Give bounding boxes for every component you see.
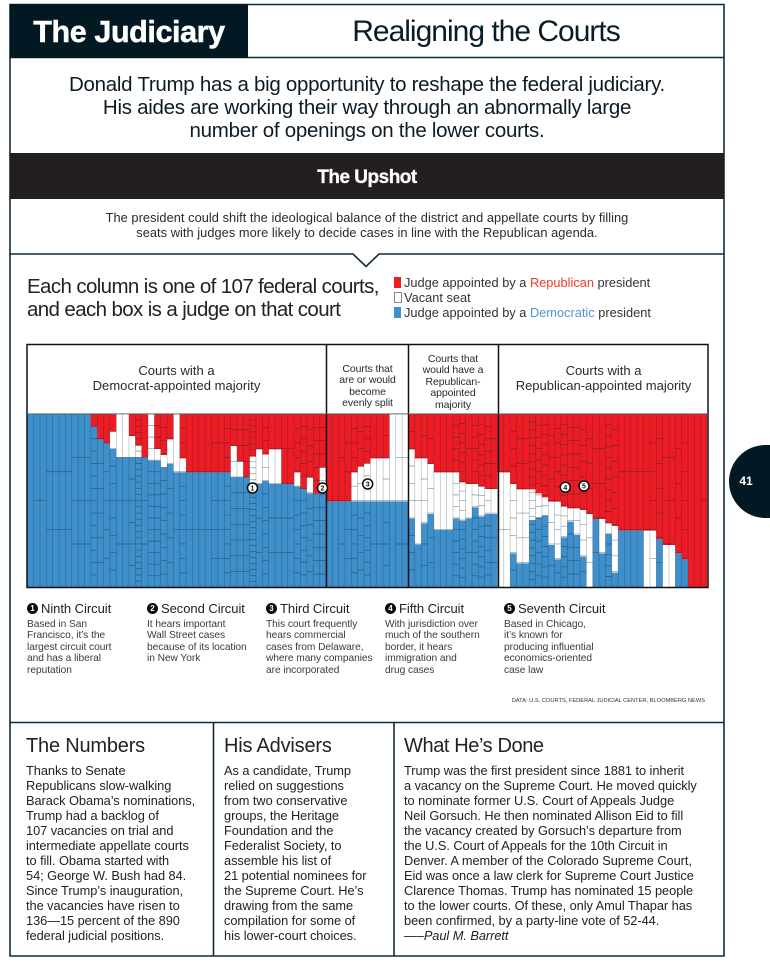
callout: Third Circuit: hears commercial: [266, 630, 346, 641]
body text: his lower-court choices.: [224, 928, 357, 943]
body text: federal judicial positions.: [26, 928, 164, 943]
header: evenly split: evenly split: [342, 397, 393, 409]
intro text: His aides are working their way through an abnormally large: [103, 96, 631, 118]
legend labels: Vacant seat: [404, 290, 471, 305]
callout: Fifth Circuit: Fifth Circuit: [399, 601, 464, 616]
header: Republican majority: Courts with a: [566, 363, 641, 378]
marker 2: 2: [321, 486, 325, 492]
body text: Denver. A member of the Colorado Supreme Court,: [404, 853, 692, 868]
body text: 107 vacancies on trial and: [26, 823, 173, 838]
callout: Seventh Circuit: [504, 601, 606, 676]
heading: What He’s Done: [404, 735, 544, 757]
source note: DATA: U.S. COURTS, FEDERAL JUDICIAL CENTER, BLOOMBERG NEWS: [512, 698, 705, 704]
panel: What He's Done: [404, 735, 697, 943]
header: Republican majority: [516, 363, 692, 393]
body text: Clarence Thomas. Trump has nominated 15 people: [404, 883, 693, 898]
body text: As a candidate, Trump: [224, 763, 351, 778]
intro text: number of openings on the lower courts.: [190, 118, 544, 142]
legend labels: [404, 275, 651, 320]
legend: vacant swatch: [394, 292, 402, 303]
section label: The Judiciary: The Judiciary: [33, 15, 225, 49]
callout: Ninth Circuit: Francisco, it’s the: [27, 630, 105, 641]
marker 2: [318, 483, 328, 493]
body text: Eid was once a law clerk for Supreme Court Justice: [404, 868, 694, 883]
summary text: [106, 210, 628, 240]
header: would have Republican majority: appointed: [430, 387, 476, 399]
body text: groups, the Heritage: [224, 808, 339, 823]
legend labels: Judge appointed by a Republican president: [404, 275, 650, 290]
callout: Fifth Circuit: immigration and: [385, 653, 457, 664]
body text: [404, 763, 697, 943]
callout: Ninth Circuit: Based in San: [27, 619, 87, 630]
callout: Seventh Circuit: 5: [507, 604, 512, 613]
chart explanation heading: [27, 275, 379, 321]
panel: His Advisers: [224, 735, 366, 943]
header: evenly split: are or would: [339, 374, 396, 386]
heading: His Advisers: [224, 735, 332, 757]
body text: Republicans slow-walking: [26, 778, 171, 793]
page number tab: 41: [739, 474, 753, 488]
callout: Second Circuit: [147, 601, 247, 664]
callout: Third Circuit: 3: [269, 604, 274, 613]
callout: Seventh Circuit: producing influential: [504, 642, 594, 653]
body text: Federalist Society, to: [224, 838, 341, 853]
body text: 136—15 percent of the 890: [26, 913, 180, 928]
marker 1: 1: [251, 486, 255, 492]
header: would have Republican majority: majority: [435, 398, 471, 410]
callout: Fifth Circuit: 4: [388, 604, 393, 613]
callout: Third Circuit: cases from Delaware,: [266, 642, 364, 653]
callout: Second Circuit: 2: [150, 604, 155, 613]
body text: assemble his list of: [224, 853, 331, 868]
callout: Ninth Circuit: [27, 601, 112, 676]
callout: Second Circuit: Wall Street cases: [147, 630, 225, 641]
callout: Seventh Circuit: Based in Chicago,: [504, 619, 586, 630]
body text: to nominate former U.S. Court of Appeals Judge: [404, 793, 674, 808]
callout: Fifth Circuit: [385, 601, 480, 676]
callout: Seventh Circuit: it’s known for: [504, 630, 563, 641]
column headers: [93, 352, 692, 410]
header: would have Republican majority: Republican-: [426, 376, 480, 388]
body text: Barack Obama’s nominations,: [26, 793, 195, 808]
callout: Third Circuit: Third Circuit: [280, 601, 349, 616]
banner: The Upshot: The Upshot: [317, 167, 417, 188]
body text: the Supreme Court. He’s: [224, 883, 363, 898]
intro text: Donald Trump has a big opportunity to reshape the federal judiciary.: [69, 72, 665, 96]
marker 1: [248, 483, 258, 493]
body text: Since Trump’s inauguration,: [26, 883, 183, 898]
heading: The Numbers: [26, 735, 145, 757]
header: would have Republican majority: [422, 352, 484, 410]
body text: Trump was the first president since 1881 to inherit: [404, 763, 684, 778]
callout: Seventh Circuit: economics-oriented: [504, 653, 592, 664]
page number tab: [729, 445, 770, 518]
callout: Second Circuit: in New York: [147, 653, 200, 664]
marker 5: 5: [582, 484, 586, 490]
callout: Third Circuit: [266, 601, 373, 676]
marker 4: [560, 482, 570, 492]
header: would have Republican majority: would have a: [423, 364, 483, 376]
body text: drawing from the same: [224, 898, 353, 913]
callout: Ninth Circuit: Ninth Circuit: [41, 601, 111, 616]
summary text: The president could shift the ideological balance of the district and appellate courts by filling: [106, 210, 628, 224]
marker 5: [579, 481, 589, 491]
callout: Fifth Circuit: drug cases: [385, 665, 434, 676]
body text: relied on suggestions: [224, 778, 344, 793]
marker 3: 3: [366, 482, 370, 488]
body text: to fill. Obama started with: [26, 853, 169, 868]
callout: Second Circuit: because of its location: [147, 642, 247, 653]
body text: Thanks to Senate: [26, 763, 126, 778]
legend labels: Judge appointed by a Democratic president: [404, 305, 651, 320]
callout: Second Circuit: Second Circuit: [161, 601, 245, 616]
header: Democrat majority: [93, 363, 260, 393]
header: Republican majority: Republican-appointed majority: [516, 378, 691, 393]
panel: The Numbers: [26, 735, 195, 943]
chart explanation heading: and each box is a judge on that court: [27, 298, 340, 321]
legend: blue swatch: [394, 307, 401, 318]
callout: Fifth Circuit: With jurisdiction over: [385, 619, 478, 630]
callout: Fifth Circuit: much of the southern: [385, 630, 480, 641]
header: evenly split: Courts that: [342, 362, 393, 374]
callout: Ninth Circuit: and has a liberal: [27, 653, 101, 664]
header: Democrat majority: Courts with a: [138, 363, 215, 378]
body text: a vacancy on the Supreme Court. He moved quickly: [404, 778, 697, 793]
body text: to the lower courts. Of these, only Amul Thapar has: [404, 898, 692, 913]
body text: been confirmed, by a party-line vote of 52-44.: [404, 913, 659, 928]
legend: [394, 275, 651, 320]
chart explanation heading: Each column is one of 107 federal courts,: [27, 275, 379, 298]
marker 4: 4: [563, 485, 567, 492]
body text: from two conservative: [224, 793, 347, 808]
body text: —–Paul M. Barrett: [404, 928, 508, 943]
section label: The Judiciary: [10, 4, 248, 58]
body text: 54; George W. Bush had 84.: [26, 868, 186, 883]
body text: the vacancy created by Gorsuch’s departure from: [404, 823, 682, 838]
body text: the U.S. Court of Appeals for the 10th Circuit in: [404, 838, 668, 853]
callout: Ninth Circuit: largest circuit court: [27, 642, 111, 653]
legend: red swatch: [394, 277, 401, 288]
body text: Neil Gorsuch. He then nominated Allison Eid to fill: [404, 808, 683, 823]
callout: Ninth Circuit: 1: [30, 604, 35, 613]
header: Democrat majority: Democrat-appointed majority: [93, 378, 260, 393]
callout: Third Circuit: This court frequently: [266, 619, 357, 630]
summary text: seats with judges more likely to decide cases in line with the Republican agenda.: [136, 225, 598, 240]
body text: [224, 763, 366, 943]
intro text: [69, 72, 665, 142]
header: evenly split: [339, 362, 396, 409]
title: Realigning the Courts: [352, 15, 620, 48]
body text: Trump had a backlog of: [26, 808, 159, 823]
marker 3: [363, 479, 373, 489]
callout: Third Circuit: where many companies: [266, 653, 373, 664]
callout: Fifth Circuit: border, it hears: [385, 642, 452, 653]
callout: Seventh Circuit: Seventh Circuit: [518, 601, 605, 616]
body text: compilation for some of: [224, 913, 355, 928]
body text: the vacancies have risen to: [26, 898, 180, 913]
body text: [26, 763, 195, 943]
header: evenly split: become: [349, 386, 386, 398]
callout: Seventh Circuit: case law: [504, 665, 543, 676]
banner: The Upshot: [10, 153, 724, 199]
callout: Second Circuit: It hears important: [147, 619, 225, 630]
body text: intermediate appellate courts: [26, 838, 189, 853]
callout: Ninth Circuit: reputation: [27, 665, 72, 676]
header: would have Republican majority: Courts that: [428, 352, 478, 364]
body text: Foundation and the: [224, 823, 333, 838]
body text: 21 potential nominees for: [224, 868, 366, 883]
callout: Third Circuit: are incorporated: [266, 665, 339, 676]
